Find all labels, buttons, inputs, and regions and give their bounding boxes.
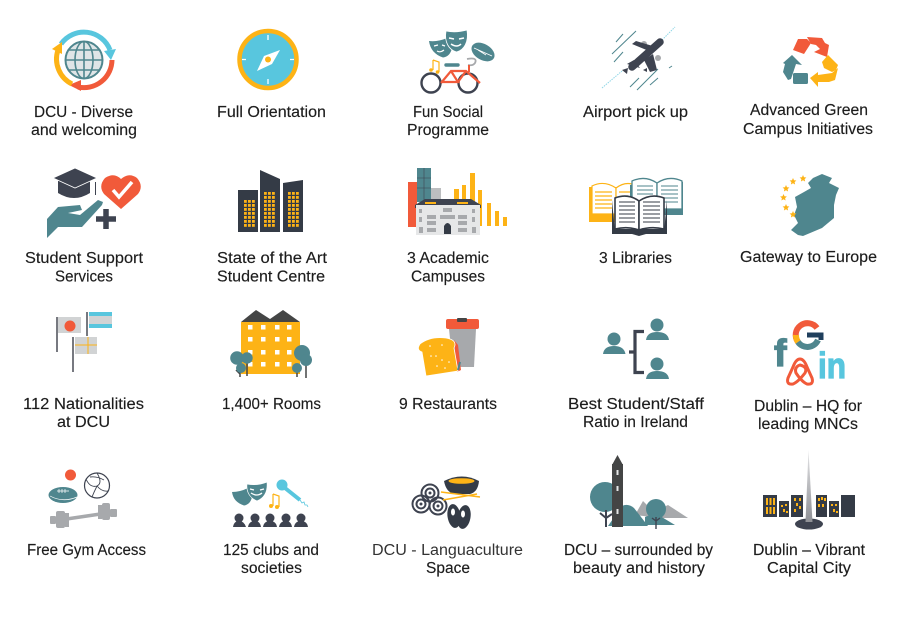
- panel: restaurants: [399, 318, 497, 413]
- panel: academic campuses: [407, 168, 507, 286]
- panel: student support services: [25, 168, 144, 286]
- panel: languaculture space: [372, 476, 523, 577]
- label: Campus Initiatives: [743, 121, 873, 138]
- label: Gateway to Europe: [740, 249, 877, 266]
- label: Dublin – Vibrant: [753, 542, 866, 559]
- icon: campus buildings and towers: [408, 168, 507, 235]
- panel: student staff ratio: [568, 318, 705, 431]
- label: Full Orientation: [217, 104, 326, 121]
- label: and welcoming: [31, 122, 137, 139]
- panel: airport pick up: [583, 27, 688, 121]
- label: [568, 396, 705, 431]
- icon: round tower, trees and hills: [590, 455, 688, 529]
- panel: vibrant capital city: [753, 450, 866, 577]
- label: Student Centre: [217, 268, 325, 286]
- icon: Dublin spire and skyline: [763, 450, 855, 530]
- panel: beauty and history: [564, 455, 713, 577]
- panel: nationalities: [23, 312, 144, 431]
- panel: libraries: [589, 178, 683, 267]
- icon: three open books: [589, 178, 683, 236]
- panel: gateway to europe: [740, 174, 877, 266]
- icon: company logos: [774, 323, 846, 386]
- label: 112 Nationalities: [23, 396, 144, 413]
- label: 3 Libraries: [599, 250, 672, 267]
- label: Capital City: [767, 560, 851, 577]
- label: Free Gym Access: [27, 542, 146, 559]
- label: [25, 250, 144, 286]
- icon: company logos: f: [774, 333, 787, 375]
- panel: student centre: [217, 170, 328, 286]
- label: leading MNCs: [758, 416, 858, 433]
- label: Programme: [407, 122, 489, 139]
- icon: residence building and trees: [230, 310, 312, 378]
- label: [407, 250, 489, 286]
- icon: Ireland map with EU stars: [780, 174, 839, 236]
- label: Space: [426, 560, 470, 577]
- panel: full orientation: [217, 31, 326, 121]
- icon: recycling arrows: [783, 37, 838, 87]
- label: 1,400+ Rooms: [222, 396, 321, 413]
- label: 3 Academic: [407, 250, 489, 267]
- panel: fun social programme: [407, 30, 498, 139]
- panel: advanced green campus: [743, 37, 873, 138]
- label: [217, 250, 328, 286]
- icon: masks, note, microphone and audience: [232, 480, 308, 527]
- label: Campuses: [411, 268, 485, 286]
- label: beauty and history: [573, 560, 705, 577]
- icon: spirals, bowl, chopsticks, ballet shoes: [412, 476, 480, 530]
- icon: company logos: in: [818, 345, 846, 386]
- label: [31, 104, 137, 139]
- icon: plane with speed lines: [602, 27, 675, 90]
- label: Airport pick up: [583, 104, 688, 121]
- label: 9 Restaurants: [399, 396, 497, 413]
- label: DCU - Diverse: [34, 104, 133, 121]
- label: 125 clubs and: [223, 542, 319, 559]
- label: [223, 542, 319, 577]
- label: State of the Art: [217, 250, 328, 267]
- icon: masks, ball, note and bicycle: [422, 30, 498, 92]
- icon: one staff to two students: [603, 318, 669, 379]
- label: DCU – surrounded by: [564, 542, 713, 559]
- label: Best Student/Staff: [568, 396, 705, 413]
- panel: rooms: [222, 310, 321, 413]
- label: societies: [241, 560, 302, 577]
- label: DCU - Languaculture: [372, 542, 523, 559]
- label: [753, 542, 866, 577]
- label: [372, 542, 523, 577]
- label: [407, 104, 489, 139]
- panel: gym: [27, 470, 146, 559]
- panel: diverse and welcoming: [31, 32, 137, 139]
- label: Advanced Green: [750, 102, 868, 119]
- icon: globe with circular arrows: [52, 32, 116, 91]
- label: [23, 396, 144, 431]
- label: [743, 102, 873, 138]
- icon: compass: [240, 31, 296, 88]
- label: Fun Social: [413, 104, 483, 121]
- icon: cap, heart, hand and plus: [47, 168, 141, 238]
- label: [564, 542, 713, 577]
- icon: three office towers: [238, 170, 303, 232]
- label: Dublin – HQ for: [754, 398, 862, 415]
- label: Student Support: [25, 250, 144, 267]
- label: Services: [55, 268, 113, 286]
- panel: clubs and societies: [223, 480, 319, 577]
- label: at DCU: [57, 414, 110, 431]
- label: [754, 398, 862, 433]
- label: Ratio in Ireland: [583, 414, 688, 431]
- icon: sandwich and drink cup: [418, 318, 479, 376]
- icon: three flags: [57, 312, 112, 372]
- panel: leading MNCs: [754, 323, 862, 433]
- icon: balls and dumbbell: [48, 470, 117, 528]
